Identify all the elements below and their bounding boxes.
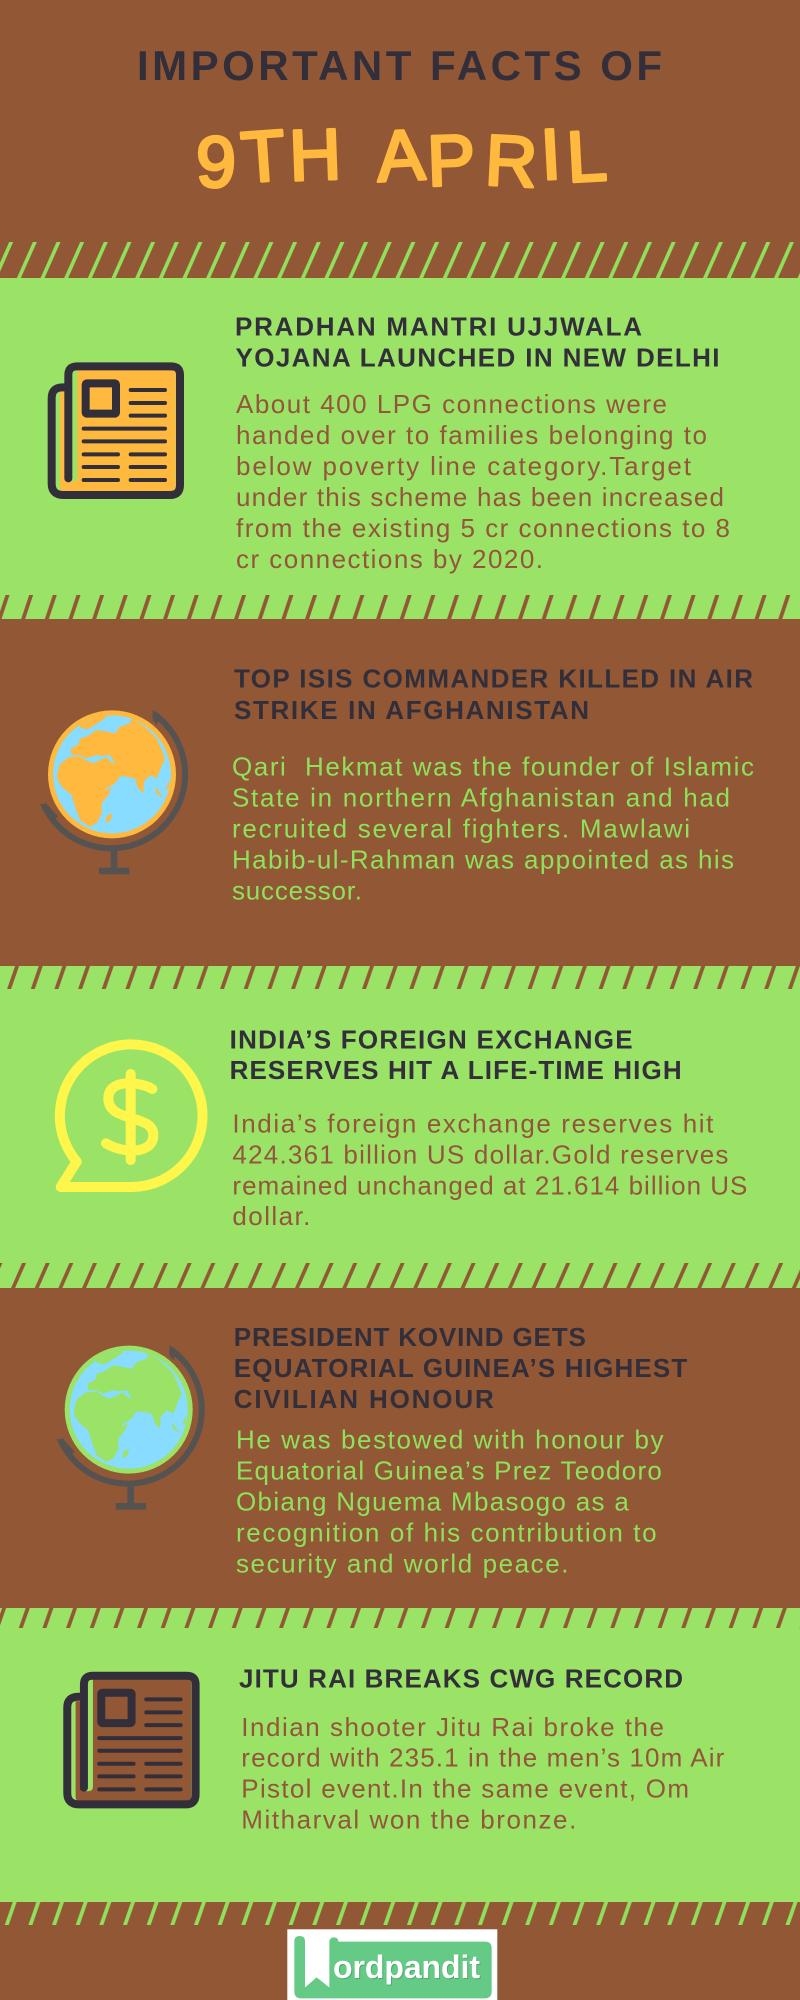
icon: newspaper brown xyxy=(67,1676,196,1804)
logo: wordpandit: ordpandit xyxy=(333,1949,480,1985)
body text: dollar. xyxy=(232,1201,310,1231)
body text: record with 235.1 in the men’s 10m Air xyxy=(241,1743,725,1773)
heading: RESERVES HIT A LIFE-TIME HIGH xyxy=(230,1055,682,1085)
body text: Obiang Nguema Mbasogo as a xyxy=(236,1486,629,1516)
title: 9th april: 9TH APRIL xyxy=(196,115,609,203)
body text: handed over to families belonging to xyxy=(236,420,707,450)
body text: India’s foreign exchange reserves hit xyxy=(232,1109,714,1139)
body text: from the existing 5 cr connections to 8 xyxy=(236,513,730,543)
panel: jitu rai xyxy=(0,1608,800,1902)
title: important facts of: IMPORTANT FACTS OF xyxy=(137,42,662,89)
heading: JITU RAI BREAKS CWG RECORD xyxy=(239,1663,683,1693)
body text: under this scheme has been increased xyxy=(236,482,724,512)
body text: recruited several fighters. Mawlawi xyxy=(232,813,690,843)
icon: globe orange xyxy=(40,710,185,874)
heading xyxy=(235,312,720,373)
body text: Mitharval won the bronze. xyxy=(241,1805,576,1835)
body text: Qari Hekmat was the founder of Islamic xyxy=(232,751,754,781)
body text: About 400 LPG connections were xyxy=(236,389,667,419)
body text: He was bestowed with honour by xyxy=(236,1424,664,1454)
body text: below poverty line category.Target xyxy=(236,451,692,481)
icon: newspaper orange xyxy=(52,366,180,495)
body text xyxy=(232,1109,747,1231)
panel: ujjwala yojana xyxy=(0,278,800,619)
body text: cr connections by 2020. xyxy=(236,544,543,574)
body text: successor. xyxy=(232,875,362,905)
panel: foreign exchange xyxy=(0,966,800,1288)
body text xyxy=(236,1424,664,1578)
body text: remained unchanged at 21.614 billion US xyxy=(232,1170,747,1200)
heading: PRADHAN MANTRI UJJWALA xyxy=(235,312,642,342)
body text: State in northern Afghanistan and had xyxy=(232,782,730,812)
heading: TOP ISIS COMMANDER KILLED IN AIR xyxy=(234,663,753,693)
header panel xyxy=(0,0,800,278)
heading: STRIKE IN AFGHANISTAN xyxy=(234,695,589,725)
heading xyxy=(234,663,753,725)
body text xyxy=(241,1712,725,1835)
body text: Indian shooter Jitu Rai broke the xyxy=(241,1712,664,1742)
icon: globe green xyxy=(57,1345,202,1510)
heading xyxy=(230,1024,682,1085)
body text: 424.361 billion US dollar.Gold reserves xyxy=(232,1139,728,1169)
body text: recognition of his contribution to xyxy=(236,1517,657,1547)
body text xyxy=(232,751,754,905)
panel: president kovind xyxy=(0,1288,800,1608)
body text: Pistol event.In the same event, Om xyxy=(241,1774,689,1804)
footer panel xyxy=(0,1902,800,2000)
heading: INDIA’S FOREIGN EXCHANGE xyxy=(230,1024,633,1054)
body text: security and world peace. xyxy=(236,1548,568,1578)
body text xyxy=(236,389,730,574)
heading xyxy=(234,1322,687,1414)
panel: isis commander xyxy=(0,619,800,966)
body text: Equatorial Guinea’s Prez Teodoro xyxy=(236,1455,662,1485)
heading: PRESIDENT KOVIND GETS xyxy=(234,1322,586,1352)
heading: EQUATORIAL GUINEA’S HIGHEST xyxy=(234,1353,687,1383)
icon: dollar speech bubble xyxy=(60,1044,203,1187)
logo: wordpandit xyxy=(287,1929,497,2000)
body text: Habib-ul-Rahman was appointed as his xyxy=(232,844,734,874)
heading: YOJANA LAUNCHED IN NEW DELHI xyxy=(236,343,720,373)
heading: CIVILIAN HONOUR xyxy=(234,1384,494,1414)
